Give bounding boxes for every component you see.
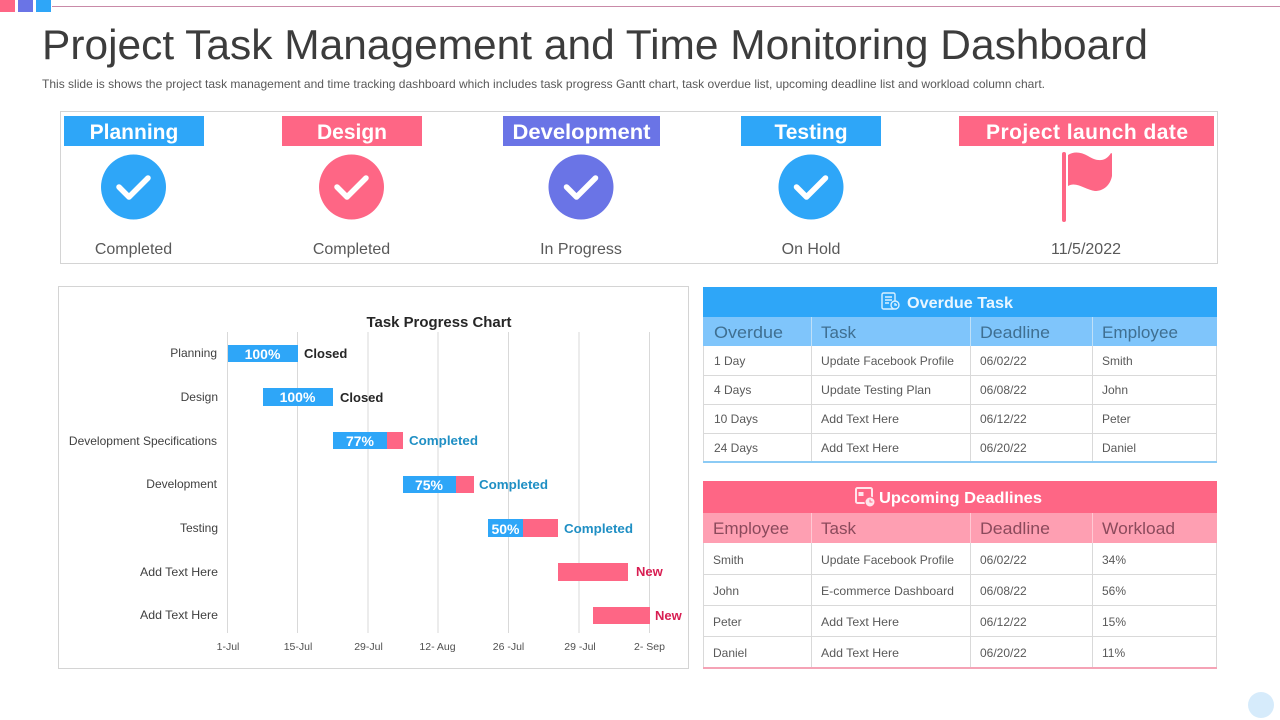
- table rows: upcoming: 15%: [1102, 615, 1126, 629]
- table rows: overdue: 06/08/22: [980, 383, 1027, 397]
- table rows: upcoming: 56%: [1102, 584, 1126, 598]
- table header: upcoming deadlines: Upcoming Deadlines: [879, 490, 1042, 507]
- phase: planning: Planning: [90, 121, 178, 144]
- chart categories: Add Text Here: [140, 608, 218, 622]
- gantt bar: planning: 100%: [245, 346, 281, 362]
- table rows: upcoming: 06/08/22: [980, 584, 1027, 598]
- table rows: overdue: John: [1102, 383, 1128, 397]
- table column headers: overdue: Employee: [1102, 323, 1178, 342]
- chart categories: [69, 346, 218, 622]
- table rows: overdue: Peter: [1102, 412, 1131, 426]
- chart title: Task Progress Chart: [366, 315, 512, 331]
- table rows: overdue: Daniel: [1102, 441, 1136, 455]
- chart axis labels: [217, 641, 665, 653]
- table rows: upcoming: 06/12/22: [980, 615, 1027, 629]
- gantt bar: add text here 2: New: [655, 608, 683, 623]
- table rows: overdue: 24 Days: [714, 441, 758, 455]
- table rows: upcoming: [713, 553, 1126, 660]
- table column headers: overdue: [703, 317, 1217, 346]
- table rows: upcoming: Peter: [713, 615, 742, 629]
- table rows: upcoming: Smith: [713, 553, 744, 567]
- gantt bar: design: 100%: [280, 389, 316, 405]
- table rows: overdue: Add Text Here: [821, 441, 899, 455]
- phase: design: Completed: [313, 241, 390, 258]
- gantt bar: development: [403, 476, 548, 493]
- table rows: upcoming: John: [713, 584, 739, 598]
- table column headers: overdue: Overdue: [714, 323, 783, 342]
- gantt bar: development: 75%: [415, 477, 444, 493]
- table rows: overdue: 06/20/22: [980, 441, 1027, 455]
- chart axis labels: 26 -Jul: [493, 641, 524, 653]
- phase: project launch date: [959, 116, 1214, 258]
- title: Project Task Management and Time Monitoring Dashboard: [42, 21, 1148, 68]
- table rows: overdue: [714, 354, 1136, 455]
- phase: development: Development: [512, 121, 650, 144]
- gantt bar: design: [263, 388, 383, 406]
- table rows: overdue: 10 Days: [714, 412, 758, 426]
- phase: design: Design: [317, 121, 387, 144]
- table rows: upcoming: 06/20/22: [980, 646, 1027, 660]
- table rows: overdue: Add Text Here: [821, 412, 899, 426]
- table column headers: upcoming: Task: [821, 519, 856, 538]
- chart categories: Development: [146, 477, 218, 491]
- phase: design: [282, 116, 422, 258]
- phase: development: In Progress: [540, 241, 622, 258]
- chart categories: Planning: [170, 346, 217, 360]
- table column headers: upcoming: Deadline: [980, 519, 1050, 538]
- gantt bar: planning: Closed: [304, 346, 347, 361]
- chart axis labels: 12- Aug: [419, 641, 456, 653]
- table rows: overdue: Update Facebook Profile: [821, 354, 954, 368]
- table rows: overdue: 1 Day: [714, 354, 745, 368]
- table rows: upcoming: 11%: [1102, 646, 1125, 660]
- decorative top squares: [0, 0, 51, 12]
- phase: testing: [741, 116, 881, 258]
- table rows: overdue: Smith: [1102, 354, 1133, 368]
- table rows: upcoming: Daniel: [713, 646, 747, 660]
- table: overdue task: [703, 287, 1217, 463]
- table rows: overdue: 06/12/22: [980, 412, 1027, 426]
- phase: project launch date: Project launch date: [986, 121, 1188, 144]
- chart categories: Add Text Here: [140, 565, 218, 579]
- panel: project phases: [60, 112, 1218, 264]
- icon: document clock: [882, 293, 899, 309]
- phase: planning: Completed: [95, 241, 172, 258]
- gantt bar: planning: [228, 345, 347, 362]
- table column headers: upcoming: Employee: [713, 519, 789, 538]
- subtitle: This slide is shows the project task management and time tracking dashboard which includes task progress Gantt chart, task overdue list, upcoming deadline list and workload column chart.: [42, 77, 1045, 91]
- chart categories: Testing: [180, 521, 218, 535]
- gantt bar: add text here 2: [593, 607, 683, 624]
- table rows: upcoming: 34%: [1102, 553, 1126, 567]
- table rows: overdue: 06/02/22: [980, 354, 1027, 368]
- chart categories: Design: [181, 390, 218, 404]
- gantt bar: development specifications: Completed: [409, 433, 478, 448]
- chart axis labels: 29 -Jul: [564, 641, 596, 653]
- table column headers: upcoming: [703, 513, 1217, 543]
- gantt bar: testing: Completed: [564, 521, 633, 536]
- table header: upcoming deadlines: [703, 481, 1217, 513]
- chart axis labels: 29-Jul: [354, 641, 383, 653]
- phase: development: [503, 116, 660, 258]
- phase: project launch date: 11/5/2022: [1051, 241, 1121, 258]
- gantt bar: development specifications: [333, 432, 478, 449]
- table rows: upcoming: Add Text Here: [821, 615, 899, 629]
- table rows: upcoming: Update Facebook Profile: [821, 553, 954, 567]
- gantt bar: development: Completed: [479, 477, 548, 492]
- gantt bar: testing: 50%: [491, 521, 520, 537]
- table header: overdue task: [703, 287, 1217, 317]
- table column headers: overdue: Deadline: [980, 323, 1050, 342]
- gantt bar: development specifications: 77%: [346, 433, 375, 449]
- decorative corner circle: [1248, 692, 1274, 718]
- table rows: upcoming: Add Text Here: [821, 646, 899, 660]
- table column headers: overdue: Task: [821, 323, 856, 342]
- table rows: overdue: 4 Days: [714, 383, 751, 397]
- chart axis labels: 1-Jul: [217, 641, 239, 653]
- gantt bar: add text here 1: New: [636, 564, 664, 579]
- table column headers: upcoming: Workload: [1102, 519, 1175, 538]
- gantt bar: add text here 1: [558, 563, 664, 581]
- gantt bar: design: Closed: [340, 390, 383, 405]
- chart axis labels: 2- Sep: [634, 641, 665, 653]
- table header: overdue task: Overdue Task: [907, 295, 1013, 312]
- icon: flag: [1062, 152, 1112, 222]
- table rows: upcoming: 06/02/22: [980, 553, 1027, 567]
- chart categories: Development Specifications: [69, 434, 217, 448]
- phase: testing: On Hold: [782, 241, 840, 258]
- icon: calendar clock: [856, 488, 875, 507]
- phase: planning: [64, 116, 204, 258]
- gantt bar: testing: [488, 519, 633, 537]
- chart axis labels: 15-Jul: [284, 641, 312, 653]
- table rows: upcoming: E-commerce Dashboard: [821, 584, 954, 598]
- table rows: overdue: Update Testing Plan: [821, 383, 931, 397]
- panel: task progress chart: [58, 286, 688, 668]
- table: upcoming deadlines: [703, 481, 1217, 669]
- phase: testing: Testing: [774, 121, 848, 144]
